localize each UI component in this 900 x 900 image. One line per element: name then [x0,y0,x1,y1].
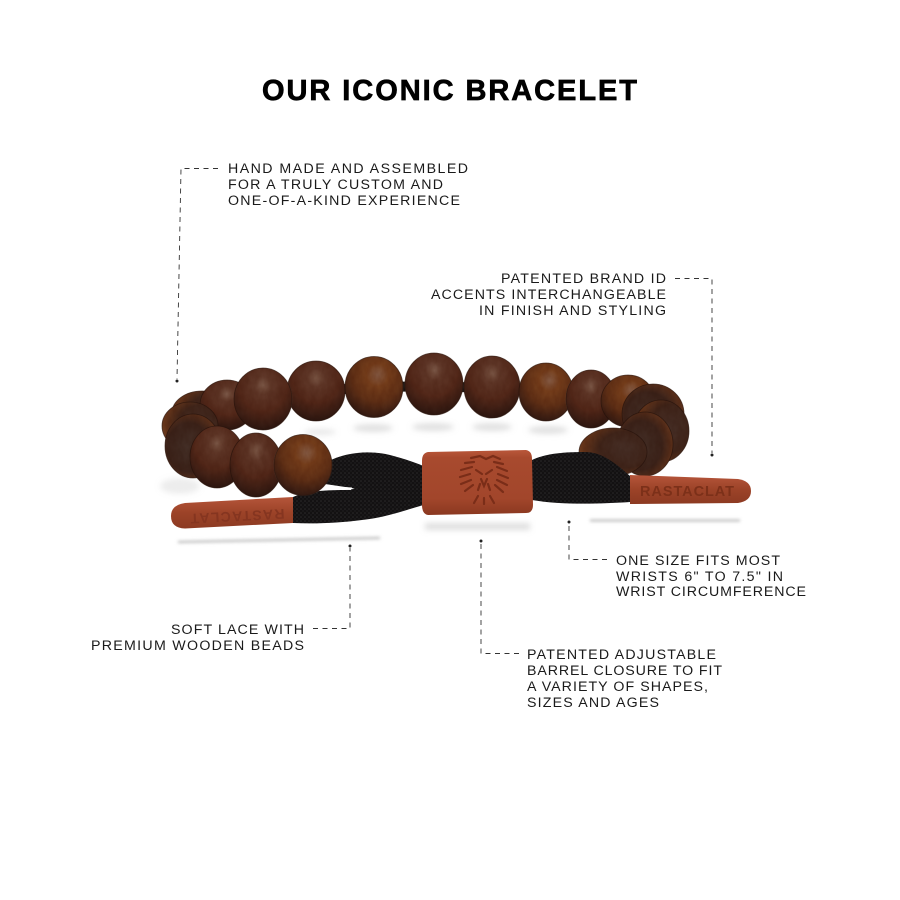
end dot: brand id [710,454,714,456]
lace gap highlight [326,486,352,490]
leader line: soft lace [313,548,350,628]
callout text: barrel closure: A VARIETY OF SHAPES, [527,679,708,695]
callout text: soft lace: SOFT LACE WITH [171,622,304,638]
icon: left lace tip [171,497,293,528]
callout: hand made [176,161,468,382]
leader line: barrel closure [481,543,519,654]
callout text: one size: WRIST CIRCUMFERENCE [616,584,806,600]
callout text: one size: WRISTS 6" TO 7.5" IN [616,569,783,585]
lace tip shadows [178,520,740,543]
callout text: one size [616,553,806,600]
icon: left lace tip: RASTACLAT [190,506,285,527]
callout text: brand id: ACCENTS INTERCHANGEABLE [431,287,666,303]
icon: front bead [274,434,332,496]
callout: barrel closure [480,540,722,711]
callout text: hand made: FOR A TRULY CUSTOM AND [228,177,443,193]
callout text: soft lace: PREMIUM WOODEN BEADS [91,638,304,654]
callout text: barrel closure: PATENTED ADJUSTABLE [527,647,716,663]
callout: one size [568,520,806,600]
callout text: brand id: PATENTED BRAND ID [501,271,666,287]
icon: right lace tip: RASTACLAT [640,484,734,500]
callout text: one size: ONE SIZE FITS MOST [616,553,780,569]
icon: black lace [293,452,630,523]
icon: right lace tip [630,475,751,504]
callout text: brand id [431,271,666,319]
leader line: one size [569,524,607,560]
icon: barrel closure [422,450,533,515]
icon: right bead cluster [566,370,689,476]
callout text: hand made: ONE-OF-A-KIND EXPERIENCE [228,193,460,209]
floor shadows [160,423,568,530]
icon: lion emboss [460,456,508,504]
callout text: barrel closure: SIZES AND AGES [527,695,659,711]
icon: top beads [287,353,573,421]
leader line: brand id [675,278,712,453]
callout text: brand id: IN FINISH AND STYLING [479,303,666,319]
icon: left bead cluster [162,368,292,497]
leader line: hand made [177,168,218,379]
callout: soft lace [91,544,352,654]
callout text: barrel closure [527,647,722,711]
end dot: barrel closure [480,540,482,542]
bracelet [162,353,751,528]
back cord [240,386,620,402]
end dot: soft lace [348,544,352,548]
callout text: hand made: HAND MADE AND ASSEMBLED [228,161,468,177]
callout text: soft lace [91,622,304,654]
callout text: barrel closure: BARREL CLOSURE TO FIT [527,663,722,679]
callout text: hand made [228,161,468,209]
callout: brand id [431,271,714,456]
end dot: hand made [176,380,178,382]
title: OUR ICONIC BRACELET [262,75,637,107]
end dot: one size [568,520,570,524]
